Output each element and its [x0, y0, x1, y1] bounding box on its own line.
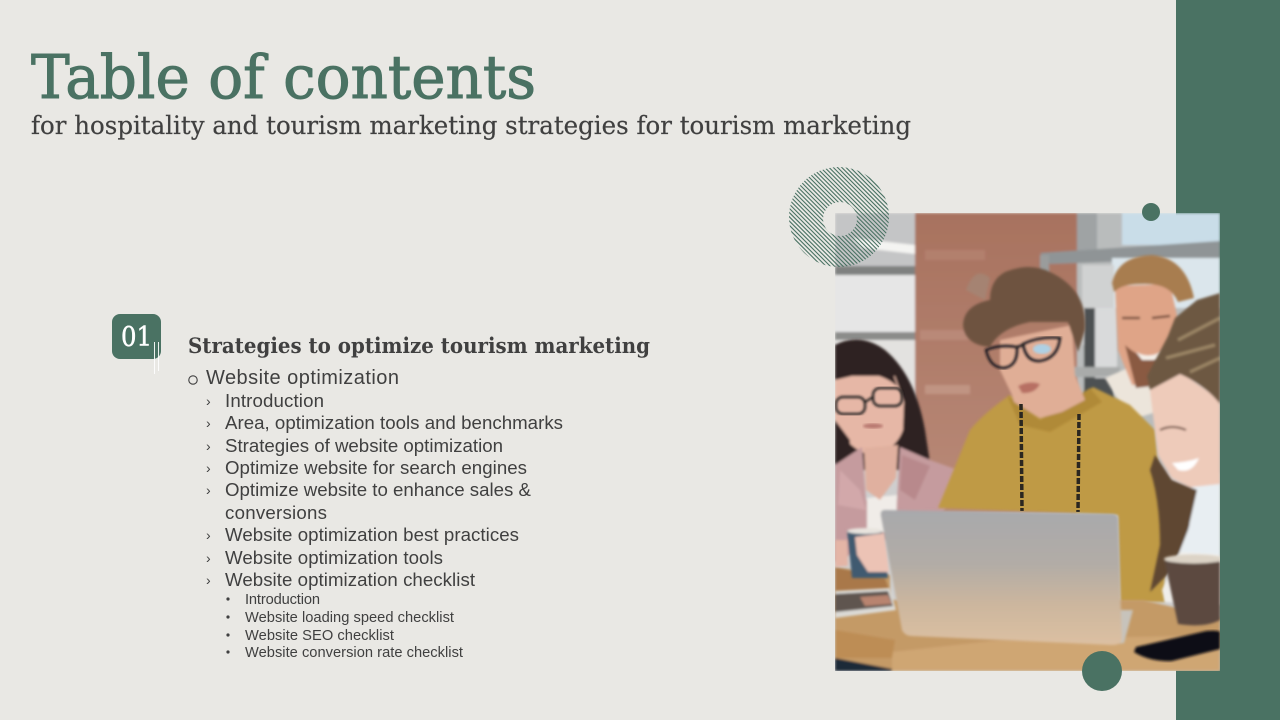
level three items: Website conversion rate checklist — [245, 645, 463, 661]
level two items: Introduction — [225, 390, 324, 411]
level two items: › — [206, 482, 211, 498]
level three items — [226, 592, 463, 661]
right green band — [1176, 0, 1280, 720]
level one item: Website optimization — [206, 367, 399, 389]
center person glasses — [986, 338, 1060, 368]
level two items: › — [206, 393, 211, 409]
photo backdrop — [835, 213, 1220, 671]
tablet on table — [835, 588, 896, 618]
phone — [1134, 631, 1220, 661]
level two items: Optimize website for search engines — [225, 457, 527, 478]
level two items: › — [206, 438, 211, 454]
laptop — [881, 510, 1133, 645]
level two items: › — [206, 415, 211, 431]
level two items: › — [206, 527, 211, 543]
section heading: Strategies to optimize tourism marketing — [188, 334, 650, 359]
level two items — [206, 390, 563, 590]
contents list — [189, 367, 563, 661]
hatched ring decoration — [789, 167, 889, 267]
center person — [938, 267, 1165, 602]
back man — [1105, 255, 1194, 420]
subtitle: for hospitality and tourism marketing strategies for tourism marketing — [31, 111, 911, 140]
level two items: › — [206, 550, 211, 566]
level three items: Website loading speed checklist — [245, 610, 454, 626]
level three items: Website SEO checklist — [245, 628, 394, 644]
left woman lips — [863, 424, 883, 428]
level two items: conversions — [225, 502, 327, 523]
level two items: Area, optimization tools and benchmarks — [225, 412, 563, 433]
level two items: Optimize website to enhance sales & — [225, 479, 532, 500]
wooden table — [835, 567, 1220, 671]
level two items: › — [206, 572, 211, 588]
section number badge: 01 — [121, 322, 152, 353]
left woman — [835, 340, 958, 562]
title: Table of contents — [31, 43, 536, 113]
left woman glasses — [836, 388, 902, 414]
level two items: Website optimization tools — [225, 547, 443, 568]
level two items: Website optimization checklist — [225, 569, 476, 590]
photo: team around a laptop — [835, 213, 1224, 671]
level two items: Website optimization best practices — [225, 524, 519, 545]
level two items: › — [206, 460, 211, 476]
mug and hands — [835, 528, 889, 578]
right woman — [1147, 293, 1220, 605]
large green dot — [1082, 651, 1122, 691]
brown mug — [1164, 554, 1224, 625]
level three items: Introduction — [245, 592, 320, 608]
glasses reflection — [1033, 344, 1051, 354]
small green dot — [1142, 203, 1160, 221]
level two items: Strategies of website optimization — [225, 435, 503, 456]
section number badge — [112, 314, 161, 374]
hoodie drawstrings — [1021, 404, 1079, 512]
